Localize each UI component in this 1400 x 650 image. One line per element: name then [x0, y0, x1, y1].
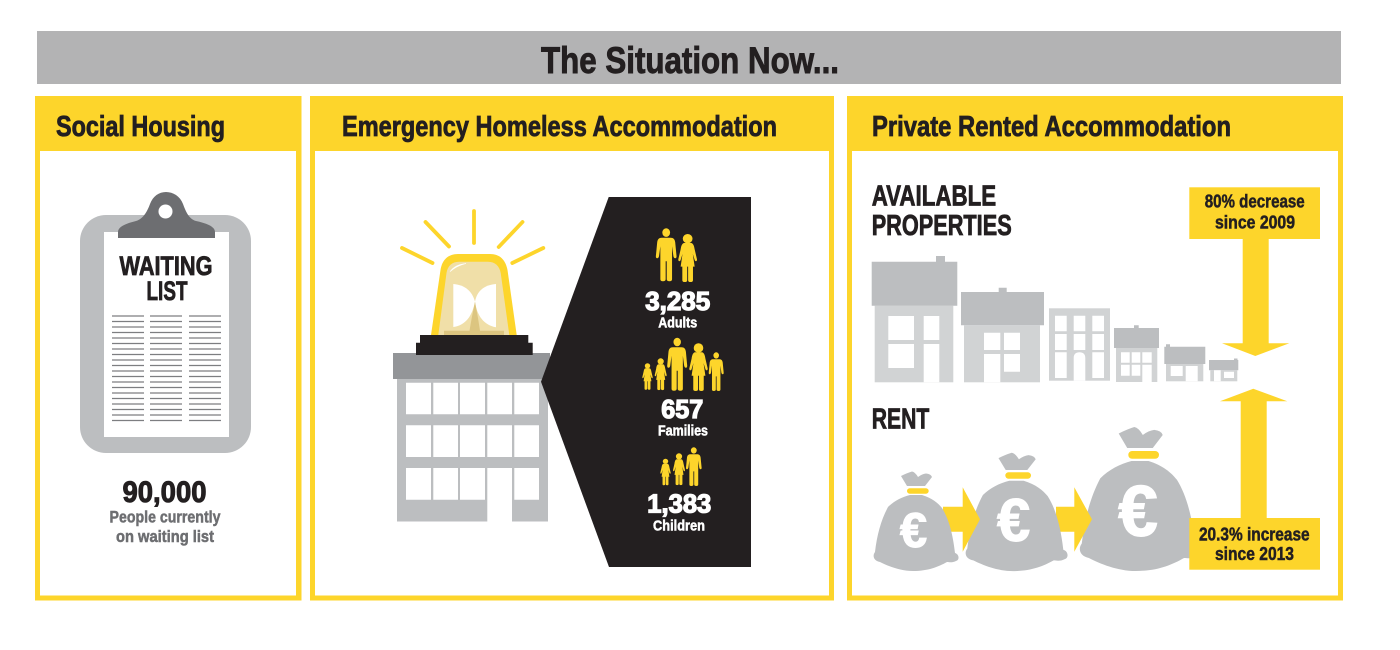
callout text: 80% decrease: 80% decrease [1205, 192, 1305, 212]
panel: emergency homeless accommodation [310, 96, 834, 600]
panel: private rented accommodation [847, 96, 1343, 600]
heading: emergency homeless accommodation: Emergency Homeless Accommodation [342, 111, 777, 143]
icon: row of shrinking houses [872, 256, 1238, 382]
heading: properties: PROPERTIES [872, 210, 1012, 242]
stat: 90,000: 90,000 [122, 476, 206, 509]
arrow: decrease [1222, 239, 1289, 356]
label: adults: Adults [658, 315, 697, 332]
arrow: increase [1220, 389, 1287, 518]
callout: black pointer panel [541, 197, 751, 567]
clipboard text: waiting list: WAITING [120, 251, 212, 281]
title banner [37, 31, 1341, 84]
icon: money bags growing: € [997, 487, 1030, 554]
caption: on waiting list: on waiting list [116, 527, 214, 546]
title: The Situation Now... [541, 40, 839, 81]
icon: money bags growing: € [900, 504, 927, 558]
icon: money bags growing [874, 427, 1200, 571]
heading: private rented accommodation: Private Rented Accommodation [872, 111, 1231, 143]
icon: children [660, 447, 702, 486]
heading: available: AVAILABLE [872, 181, 996, 213]
icon: families [642, 338, 724, 391]
clipboard text: list: LIST [146, 276, 188, 306]
callout: 80% decrease [1189, 187, 1320, 239]
label: families: Families [658, 423, 708, 440]
icon: adults [656, 228, 697, 282]
callout text: since 2009: since 2009 [1215, 212, 1295, 232]
icon: money bags growing: € [1118, 472, 1158, 552]
callout: 20.3% increase [1189, 518, 1320, 570]
stat: children number: 1,383 [647, 489, 711, 519]
callout text: since 2013: since 2013 [1215, 544, 1294, 564]
callout text: 20.3% increase: 20.3% increase [1199, 525, 1310, 545]
icon: building [393, 353, 550, 522]
icon: siren [402, 211, 543, 355]
stat: adults number: 3,285 [645, 286, 710, 316]
heading: social housing: Social Housing [56, 111, 225, 143]
panel: social housing [35, 96, 302, 600]
icon: clipboard [80, 192, 251, 453]
caption: people currently: People currently [110, 508, 221, 526]
list lines [112, 316, 221, 420]
heading: rent: RENT [872, 403, 930, 435]
stat: families number: 657 [661, 394, 703, 424]
label: children: Children [653, 518, 705, 535]
